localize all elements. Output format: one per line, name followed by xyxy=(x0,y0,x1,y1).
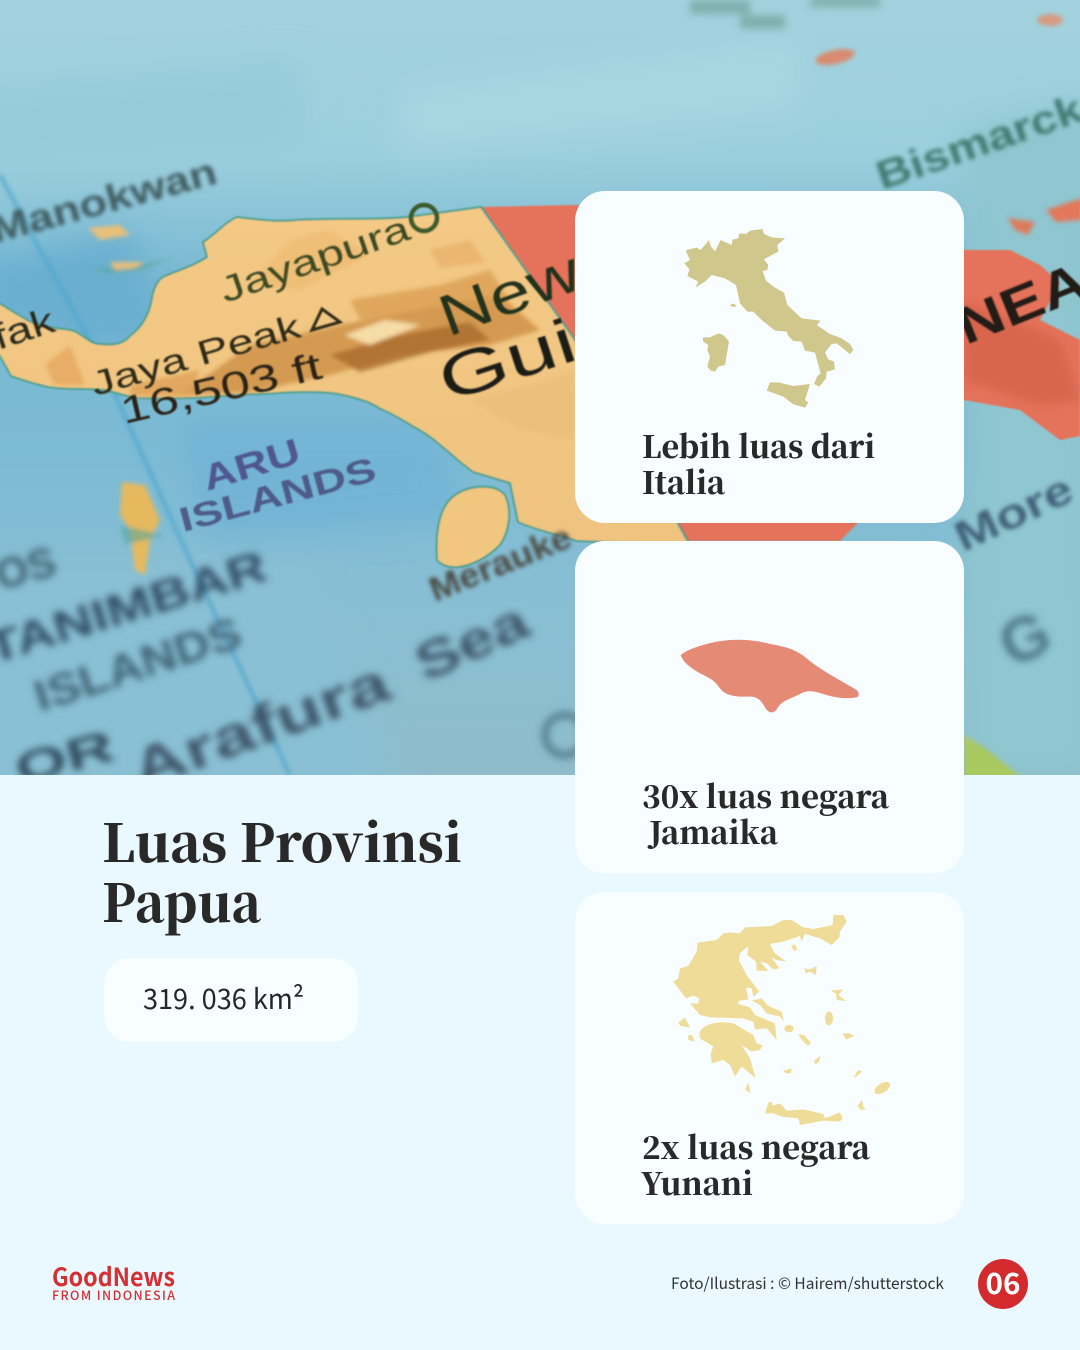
blurred map labels: More xyxy=(947,465,1080,560)
photo: blurred map of Papua xyxy=(0,0,1080,801)
sharp map labels: NEA xyxy=(949,252,1080,356)
label: Yunani xyxy=(641,1123,870,1204)
photo: blurred map of Papua: OR xyxy=(10,721,119,795)
panel: Italia xyxy=(575,191,964,523)
title: Luas Provinsi xyxy=(102,802,462,877)
panel: Yunani xyxy=(575,892,964,1224)
title xyxy=(102,802,462,937)
photo: blurred map of Papua: ISLANDS xyxy=(28,608,248,722)
blurred map labels: Merauke xyxy=(424,518,577,609)
icon: Greece map xyxy=(673,915,892,1125)
blurred map labels xyxy=(0,87,1080,609)
panel: Jamaika xyxy=(575,541,964,873)
logo: GoodNews from Indonesia: FROM INDONESIA xyxy=(52,1285,175,1304)
page number badge: 06 xyxy=(986,1261,1020,1303)
photo: blurred map of Papua: G xyxy=(989,598,1062,681)
red neighbouring land xyxy=(481,205,1080,541)
sharp map labels: ARU xyxy=(197,430,305,499)
orange land of Papua xyxy=(0,207,690,545)
label: Jamaika xyxy=(642,772,889,853)
area value pill xyxy=(104,958,358,1042)
title: Papua xyxy=(102,862,262,937)
icon: Italy map xyxy=(684,229,853,408)
photo: blurred map of Papua: Arafura xyxy=(123,649,399,801)
small islands xyxy=(87,222,163,577)
label: Yunani: 2x luas negara xyxy=(642,1123,870,1168)
label: Jamaika: Jamaika xyxy=(647,808,778,853)
sharp map labels: Gui xyxy=(430,306,584,415)
photo credit: Foto/Ilustrasi : © Hairem/shutterstock xyxy=(671,1272,944,1294)
blurred map labels: Bismarck xyxy=(871,87,1080,199)
sharp map labels: ISLANDS xyxy=(175,451,380,540)
label: Italia: Lebih luas dari xyxy=(642,422,875,467)
sharp map labels: 16,503 ft xyxy=(117,346,326,433)
page number badge xyxy=(978,1259,1028,1309)
faint distant marks xyxy=(690,0,880,29)
meridian line xyxy=(0,175,290,775)
area value pill: 319. 036 km² xyxy=(143,978,304,1018)
label: Jamaika: 30x luas negara xyxy=(642,772,889,817)
terrain shading xyxy=(45,231,540,399)
logo: GoodNews from Indonesia: GoodNews xyxy=(52,1258,175,1294)
sharp map labels: Jaya Peak xyxy=(87,307,306,404)
icon: Jamaica map xyxy=(681,640,859,712)
sharp map labels: Jayapura xyxy=(214,207,416,311)
photo: blurred map of Papua: Sea xyxy=(406,591,539,693)
Merauke island xyxy=(437,487,509,567)
far red spots xyxy=(814,14,1080,235)
green land corner xyxy=(964,734,1024,775)
label: Yunani: Yunani xyxy=(641,1159,753,1204)
label: Italia: Italia xyxy=(642,458,725,503)
sharp map labels xyxy=(0,205,1080,540)
label: Italia xyxy=(642,422,875,503)
sea shading xyxy=(0,40,1080,790)
sharp map labels: New xyxy=(430,238,590,349)
